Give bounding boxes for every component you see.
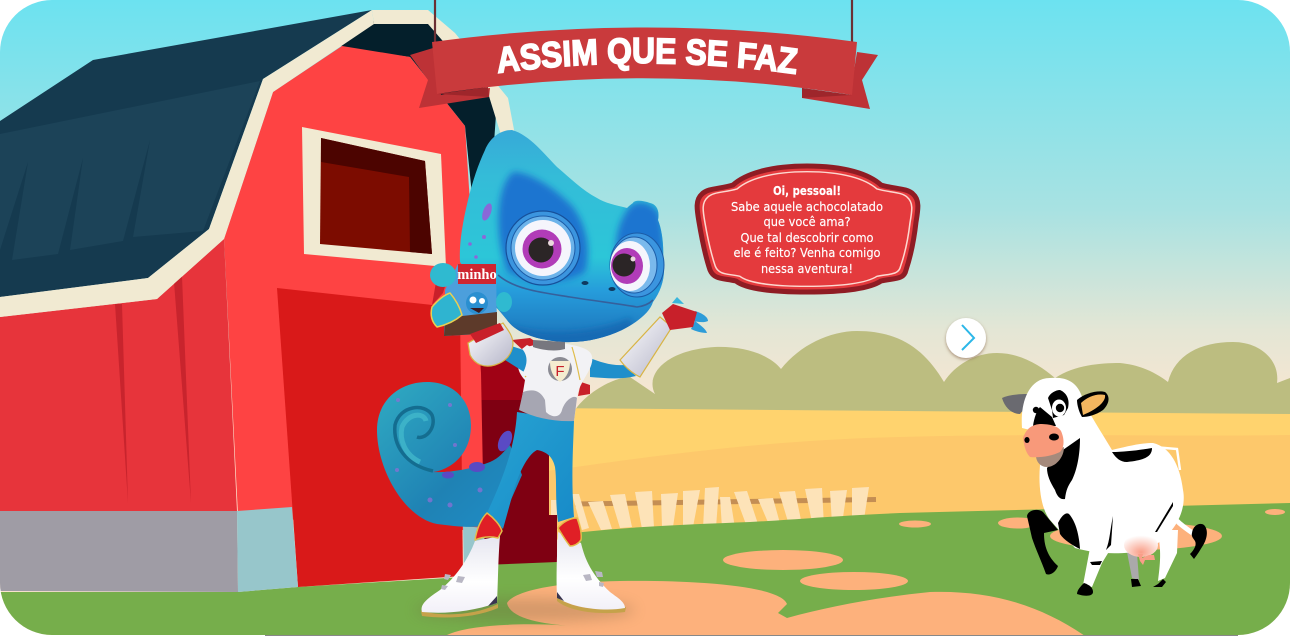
banner right tail <box>802 52 878 109</box>
speech bubble <box>697 166 918 292</box>
barn roof panels <box>0 81 260 260</box>
chameleon <box>377 130 708 617</box>
cow spots <box>1058 448 1173 550</box>
milk carton: minho <box>457 267 497 283</box>
cow tail <box>1176 520 1207 559</box>
next button <box>946 318 986 358</box>
barn side wall <box>0 239 237 511</box>
bubble text: Que tal descobrir como <box>740 230 874 245</box>
right boot <box>557 518 626 613</box>
chameleon left hand <box>430 263 512 343</box>
cow front leg <box>1077 551 1108 596</box>
cow hip outline <box>1161 446 1182 470</box>
banner left tail <box>410 48 490 108</box>
lower jaw shade <box>500 318 640 350</box>
cow body <box>1040 416 1184 554</box>
barn right trim <box>372 10 515 135</box>
dirt patches <box>445 509 1285 636</box>
right brow <box>616 202 664 285</box>
cow mouth <box>1036 447 1064 467</box>
cow <box>1002 378 1207 596</box>
cow neck patch <box>1047 438 1080 499</box>
cow snout <box>1023 424 1064 457</box>
bubble text: que você ama? <box>764 214 850 229</box>
ground shadow under chameleon <box>415 598 635 622</box>
bubble inner line <box>703 172 912 286</box>
chameleon right cuff <box>620 317 672 377</box>
head spots <box>468 202 494 259</box>
barn stone base <box>0 507 486 592</box>
cow raised leg <box>1027 510 1058 575</box>
title banner <box>410 0 878 109</box>
barn side wall grooves <box>115 276 191 503</box>
barn roof trim <box>0 10 374 317</box>
chameleon torso <box>518 343 592 421</box>
banner ribbon <box>432 28 857 95</box>
bubble text: Sabe aquele achocolatado <box>731 199 883 214</box>
cow right ear <box>1077 391 1109 417</box>
barn front wall <box>224 46 484 530</box>
barn attic shadow <box>340 20 497 200</box>
mouth line <box>498 275 653 307</box>
right eye <box>610 233 664 297</box>
title text: ASSIM QUE SE FAZ <box>498 37 798 75</box>
cow far legs <box>1127 530 1178 587</box>
banner ropes <box>435 0 852 44</box>
barn dark inner door <box>478 360 557 565</box>
left eye socket <box>498 172 588 282</box>
cow head <box>1022 378 1086 447</box>
bubble body <box>697 166 918 292</box>
tail spots <box>395 398 482 508</box>
wheat field <box>540 408 1290 540</box>
chameleon tail <box>377 382 522 527</box>
tail spines <box>442 428 515 478</box>
chameleon emblem: F <box>555 363 565 380</box>
bubble text: nessa aventura! <box>761 261 853 276</box>
hills <box>575 331 1290 416</box>
chameleon head <box>460 130 664 350</box>
chameleon right glove <box>662 297 708 333</box>
chameleon legs <box>487 412 574 529</box>
chameleon neck <box>533 340 565 350</box>
cow left ear <box>1002 394 1028 414</box>
fence <box>551 487 876 530</box>
bubble text: Oi, pessoal! <box>773 183 841 198</box>
milk carton <box>444 264 497 336</box>
chameleon left arm <box>468 323 538 377</box>
bubble text: ele é feito? Venha comigo <box>734 245 880 260</box>
card bottom shadow <box>265 634 1238 636</box>
cow eye patches <box>1033 390 1069 426</box>
chameleon cape <box>512 338 590 396</box>
left eye <box>506 211 580 285</box>
barn roof <box>0 10 372 297</box>
barn door <box>277 288 463 587</box>
cow udder <box>1124 536 1158 565</box>
barn <box>0 10 557 592</box>
bubble text <box>731 183 883 276</box>
grass <box>0 503 1290 636</box>
chameleon right arm <box>590 358 636 378</box>
head shading <box>498 172 664 350</box>
nostrils <box>582 281 616 291</box>
left boot <box>421 513 502 617</box>
barn hayloft window <box>302 127 446 267</box>
